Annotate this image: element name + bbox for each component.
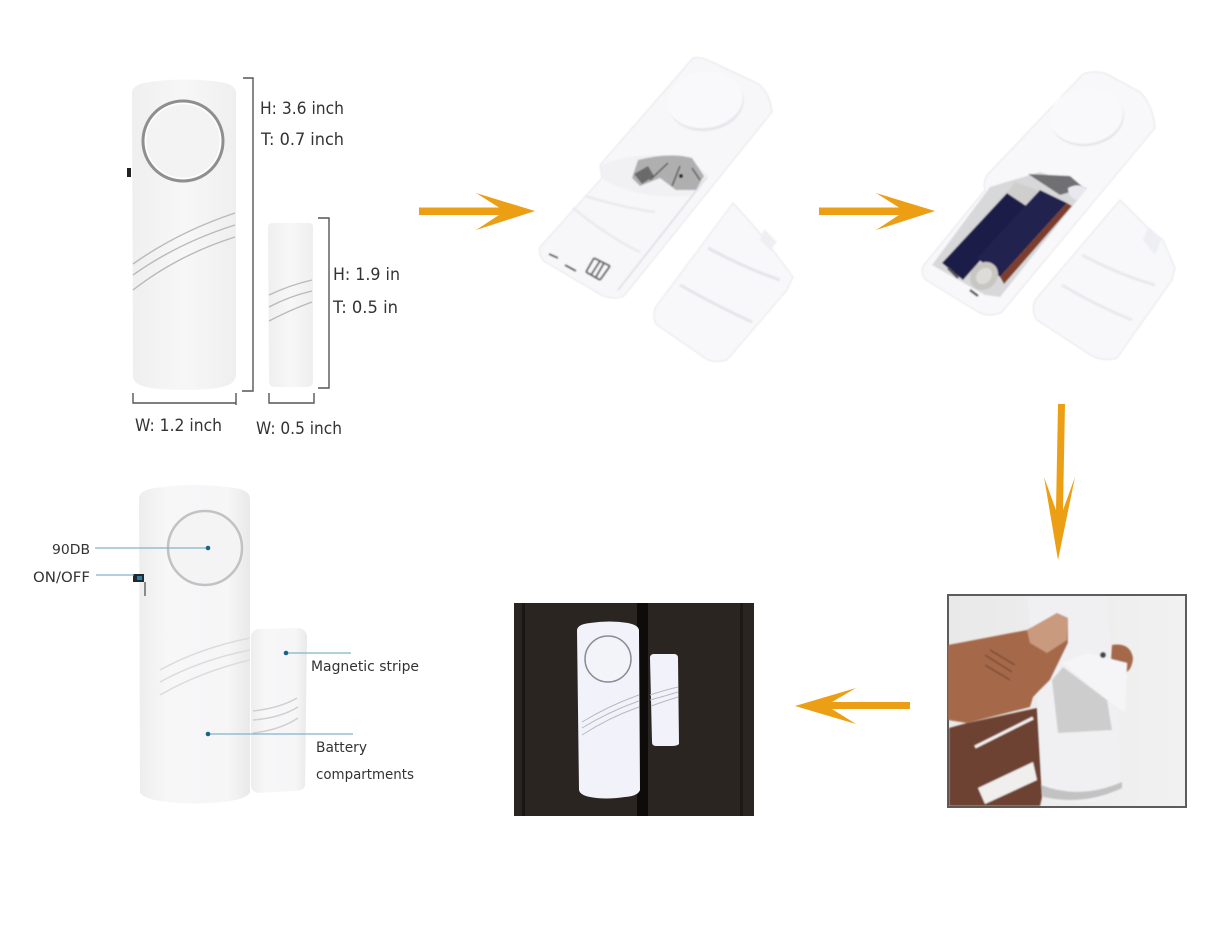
dimension labels: W: 1.2 inch [135,416,222,436]
battery cover [1033,200,1175,360]
callout: Magnetic stripe: Magnetic stripe [311,659,419,675]
dimension labels: H: 3.6 inch [260,99,344,119]
panel: opened unit with batteries [922,72,1175,360]
small magnet unit front view [268,223,313,387]
arrow: dimensions to open unit [419,193,535,230]
callout: 90DB: 90DB [52,542,90,558]
dimension labels: H: 1.9 in [333,265,400,285]
hand and device photo [948,597,1133,806]
panel: dimensions [127,78,400,439]
dimension labels [135,99,400,439]
callout: Battery compartments: compartments [316,767,414,783]
panel: opened unit without batteries [540,58,793,362]
alarm body with batteries [922,72,1155,315]
callout: Magnetic stripe [284,651,419,675]
callout: ON/OFF: ON/OFF [33,570,90,586]
dimension labels: W: 0.5 inch [256,419,342,439]
arrow: open unit to batteries installed [819,193,935,230]
panel: peeling adhesive backing photo [948,595,1186,807]
large alarm unit front view [127,80,236,390]
dark door background [514,603,754,816]
callout: 90DB [52,542,210,558]
mounted alarm unit [577,622,640,798]
arrow: adhesive step to mounted result [795,688,910,724]
dimension labels: T: 0.7 inch [260,130,344,150]
dimension brackets [133,78,329,405]
callout: Battery compartments [206,732,414,783]
battery cover [654,203,793,362]
on/off switch [133,574,146,596]
open alarm body [540,58,772,298]
dimension labels: T: 0.5 in [332,298,398,318]
magnet unit [251,628,307,793]
mounted magnet unit [650,654,679,746]
photo frame [948,595,1186,807]
alarm unit [139,485,250,804]
callout: ON/OFF [33,570,134,586]
panel: mounted on door photo [514,603,754,816]
panel: parts labelled [33,485,419,804]
arrow: batteries to adhesive step [1044,404,1075,560]
callout: Battery compartments: Battery [316,740,367,756]
